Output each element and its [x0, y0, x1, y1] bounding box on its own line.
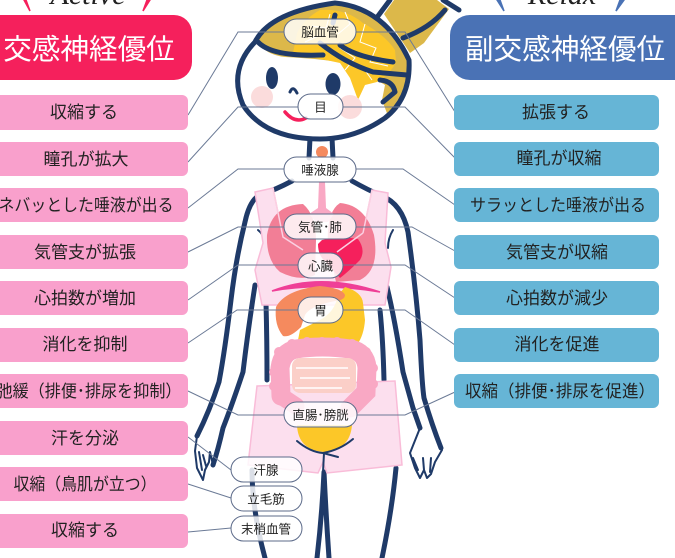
item: 収縮（排便･排尿を促進）: [465, 382, 655, 401]
item: 収縮する: [50, 103, 118, 122]
label: sweat gland: 汗腺: [253, 464, 279, 478]
label: stomach: 胃: [314, 304, 327, 318]
item: 消化を抑制: [42, 335, 128, 354]
item: [0, 235, 188, 269]
item: [0, 95, 188, 130]
trachea: [309, 182, 334, 222]
heading: parasympathetic: [450, 15, 675, 80]
item: 収縮（鳥肌が立つ）: [14, 475, 156, 494]
stomach: [297, 287, 365, 345]
label: peripheral vessels: [231, 516, 302, 541]
item: [454, 95, 659, 130]
item: 気管支が収縮: [506, 243, 608, 262]
item: [454, 188, 659, 222]
figure: woman's body: [195, 0, 459, 558]
item: [0, 421, 188, 455]
label: cerebral vessels: 脳血管: [301, 24, 339, 40]
item: サラッとした唾液が出る: [470, 196, 646, 215]
panel: sympathetic effects: [0, 95, 188, 548]
label: eye: 目: [314, 100, 327, 114]
label: stomach: [298, 297, 343, 323]
item: 消化を促進: [514, 335, 600, 354]
bladder: [297, 425, 352, 452]
item: 瞳孔が拡大: [44, 150, 128, 169]
label: trachea and lungs: [284, 214, 356, 239]
label: eye: [298, 94, 343, 119]
title: Active: [24, 0, 150, 11]
item: [454, 235, 659, 269]
label: rectum and bladder: [284, 402, 357, 427]
neckline over lungs: [273, 188, 372, 252]
heart: [318, 238, 363, 278]
liver: [276, 286, 345, 336]
label: arrector muscle: 立毛筋: [247, 492, 285, 506]
mouth: [285, 112, 306, 120]
heading: parasympathetic: 副交感神経優位: [465, 34, 665, 66]
title: Relax: [497, 0, 624, 11]
item: [454, 328, 659, 362]
item: 心拍数が減少: [506, 289, 608, 308]
heading: sympathetic: [0, 15, 192, 80]
salivary gland: [316, 146, 328, 158]
label: sweat gland: [231, 457, 302, 482]
lungs: [267, 203, 375, 282]
skirt: [248, 381, 402, 473]
item: [454, 374, 659, 408]
item: [0, 514, 188, 548]
head outline: [238, 3, 409, 139]
cheeks: [251, 86, 273, 108]
item: 汗を分泌: [51, 429, 119, 448]
item: 収縮する: [51, 521, 119, 540]
item: [0, 142, 188, 176]
head: [238, 0, 459, 139]
top garment: [255, 188, 391, 305]
hair strands: [258, 15, 407, 102]
label: salivary gland: [284, 157, 356, 182]
label: trachea and lungs: 気管･肺: [298, 220, 342, 234]
hands: [195, 428, 442, 480]
label: heart: [298, 253, 343, 278]
item: [0, 328, 188, 362]
label: rectum and bladder: 直腸･膀胱: [292, 408, 349, 422]
item: [0, 281, 188, 315]
label: peripheral vessels: 末梢血管: [241, 522, 291, 536]
item: ネバッとした唾液が出る: [0, 196, 174, 215]
eyes: [266, 67, 278, 89]
diaphragm: [272, 282, 380, 292]
body outline: [197, 138, 441, 558]
item: 拡張する: [522, 103, 590, 122]
label: heart: 心臓: [308, 260, 333, 274]
item: [454, 281, 659, 315]
item: 気管支が拡張: [34, 243, 136, 262]
intestines: [269, 337, 378, 408]
label: arrector muscle: [231, 486, 302, 511]
item: 瞳孔が収縮: [516, 149, 602, 168]
item: [0, 467, 188, 501]
pelvis lines: [297, 439, 353, 472]
item: [0, 188, 188, 222]
hair: [256, 3, 410, 116]
nose: [290, 89, 297, 93]
organ labels: [231, 19, 357, 541]
label: cerebral vessels: [284, 19, 356, 44]
item: [0, 374, 188, 408]
heading: sympathetic: 交感神経優位: [3, 34, 175, 66]
brain: [293, 10, 396, 100]
item: 弛緩（排便･排尿を抑制）: [0, 382, 182, 401]
item: [454, 142, 659, 176]
connector lines: [188, 32, 455, 532]
item: 心拍数が増加: [34, 289, 136, 308]
ponytail: [384, 0, 449, 53]
label: salivary gland: 唾液腺: [301, 164, 339, 178]
panel: parasympathetic effects: [454, 95, 659, 408]
